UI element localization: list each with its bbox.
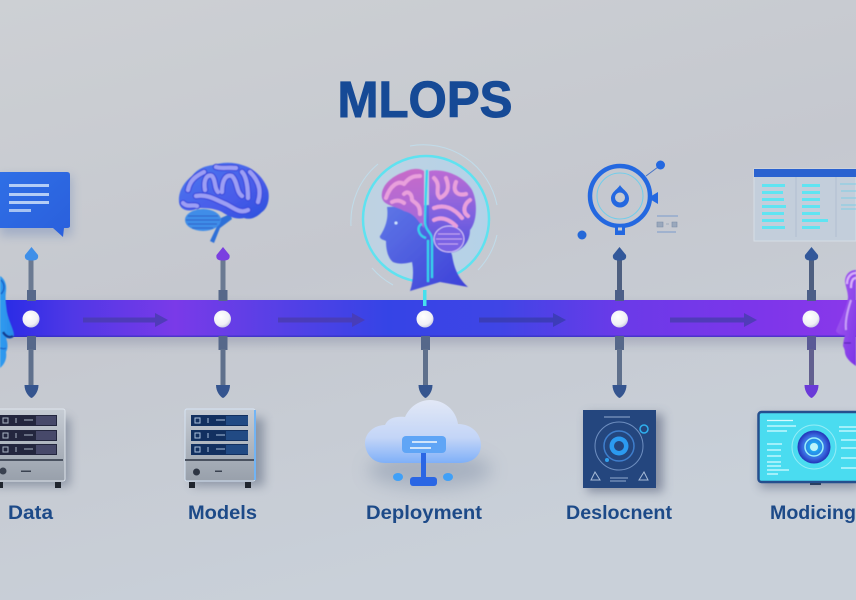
connector: Deslocnent: [611, 247, 628, 398]
timeline arrow 4: [670, 313, 757, 327]
timeline arrow 1: [83, 313, 168, 327]
icon: cloud: [365, 400, 492, 488]
connector: Data: [22, 247, 40, 398]
connector: Modicing: [802, 247, 820, 398]
icon: right purple head: [836, 270, 856, 366]
icon: deployment ring: [578, 160, 678, 240]
label: Modicing: Modicing: [770, 503, 856, 524]
label: Deployment: Deployment: [366, 503, 483, 524]
icon: chat bubble: [0, 172, 72, 237]
connector: Models: [214, 247, 231, 398]
label: Deslocnent: Deslocnent: [566, 503, 673, 524]
icon: server rack Models: [185, 409, 264, 488]
timeline bar: [0, 300, 856, 344]
icon: blue brain: [179, 163, 269, 243]
icon: left blue head: [0, 276, 14, 368]
title: MLOPS: [338, 71, 512, 128]
label: Models: Models: [188, 503, 257, 524]
icon: monitor: [758, 412, 856, 488]
icon: dashboard panel: [754, 169, 856, 241]
timeline arrow 3: [479, 313, 566, 327]
connector: Deployment: [416, 290, 434, 398]
icon: server rack Data: [0, 409, 70, 488]
timeline arrow 2: [278, 313, 365, 327]
label: Data: Data: [8, 503, 53, 524]
icon: blue control panel: [583, 410, 663, 492]
icon: human head with brain: [351, 145, 497, 291]
